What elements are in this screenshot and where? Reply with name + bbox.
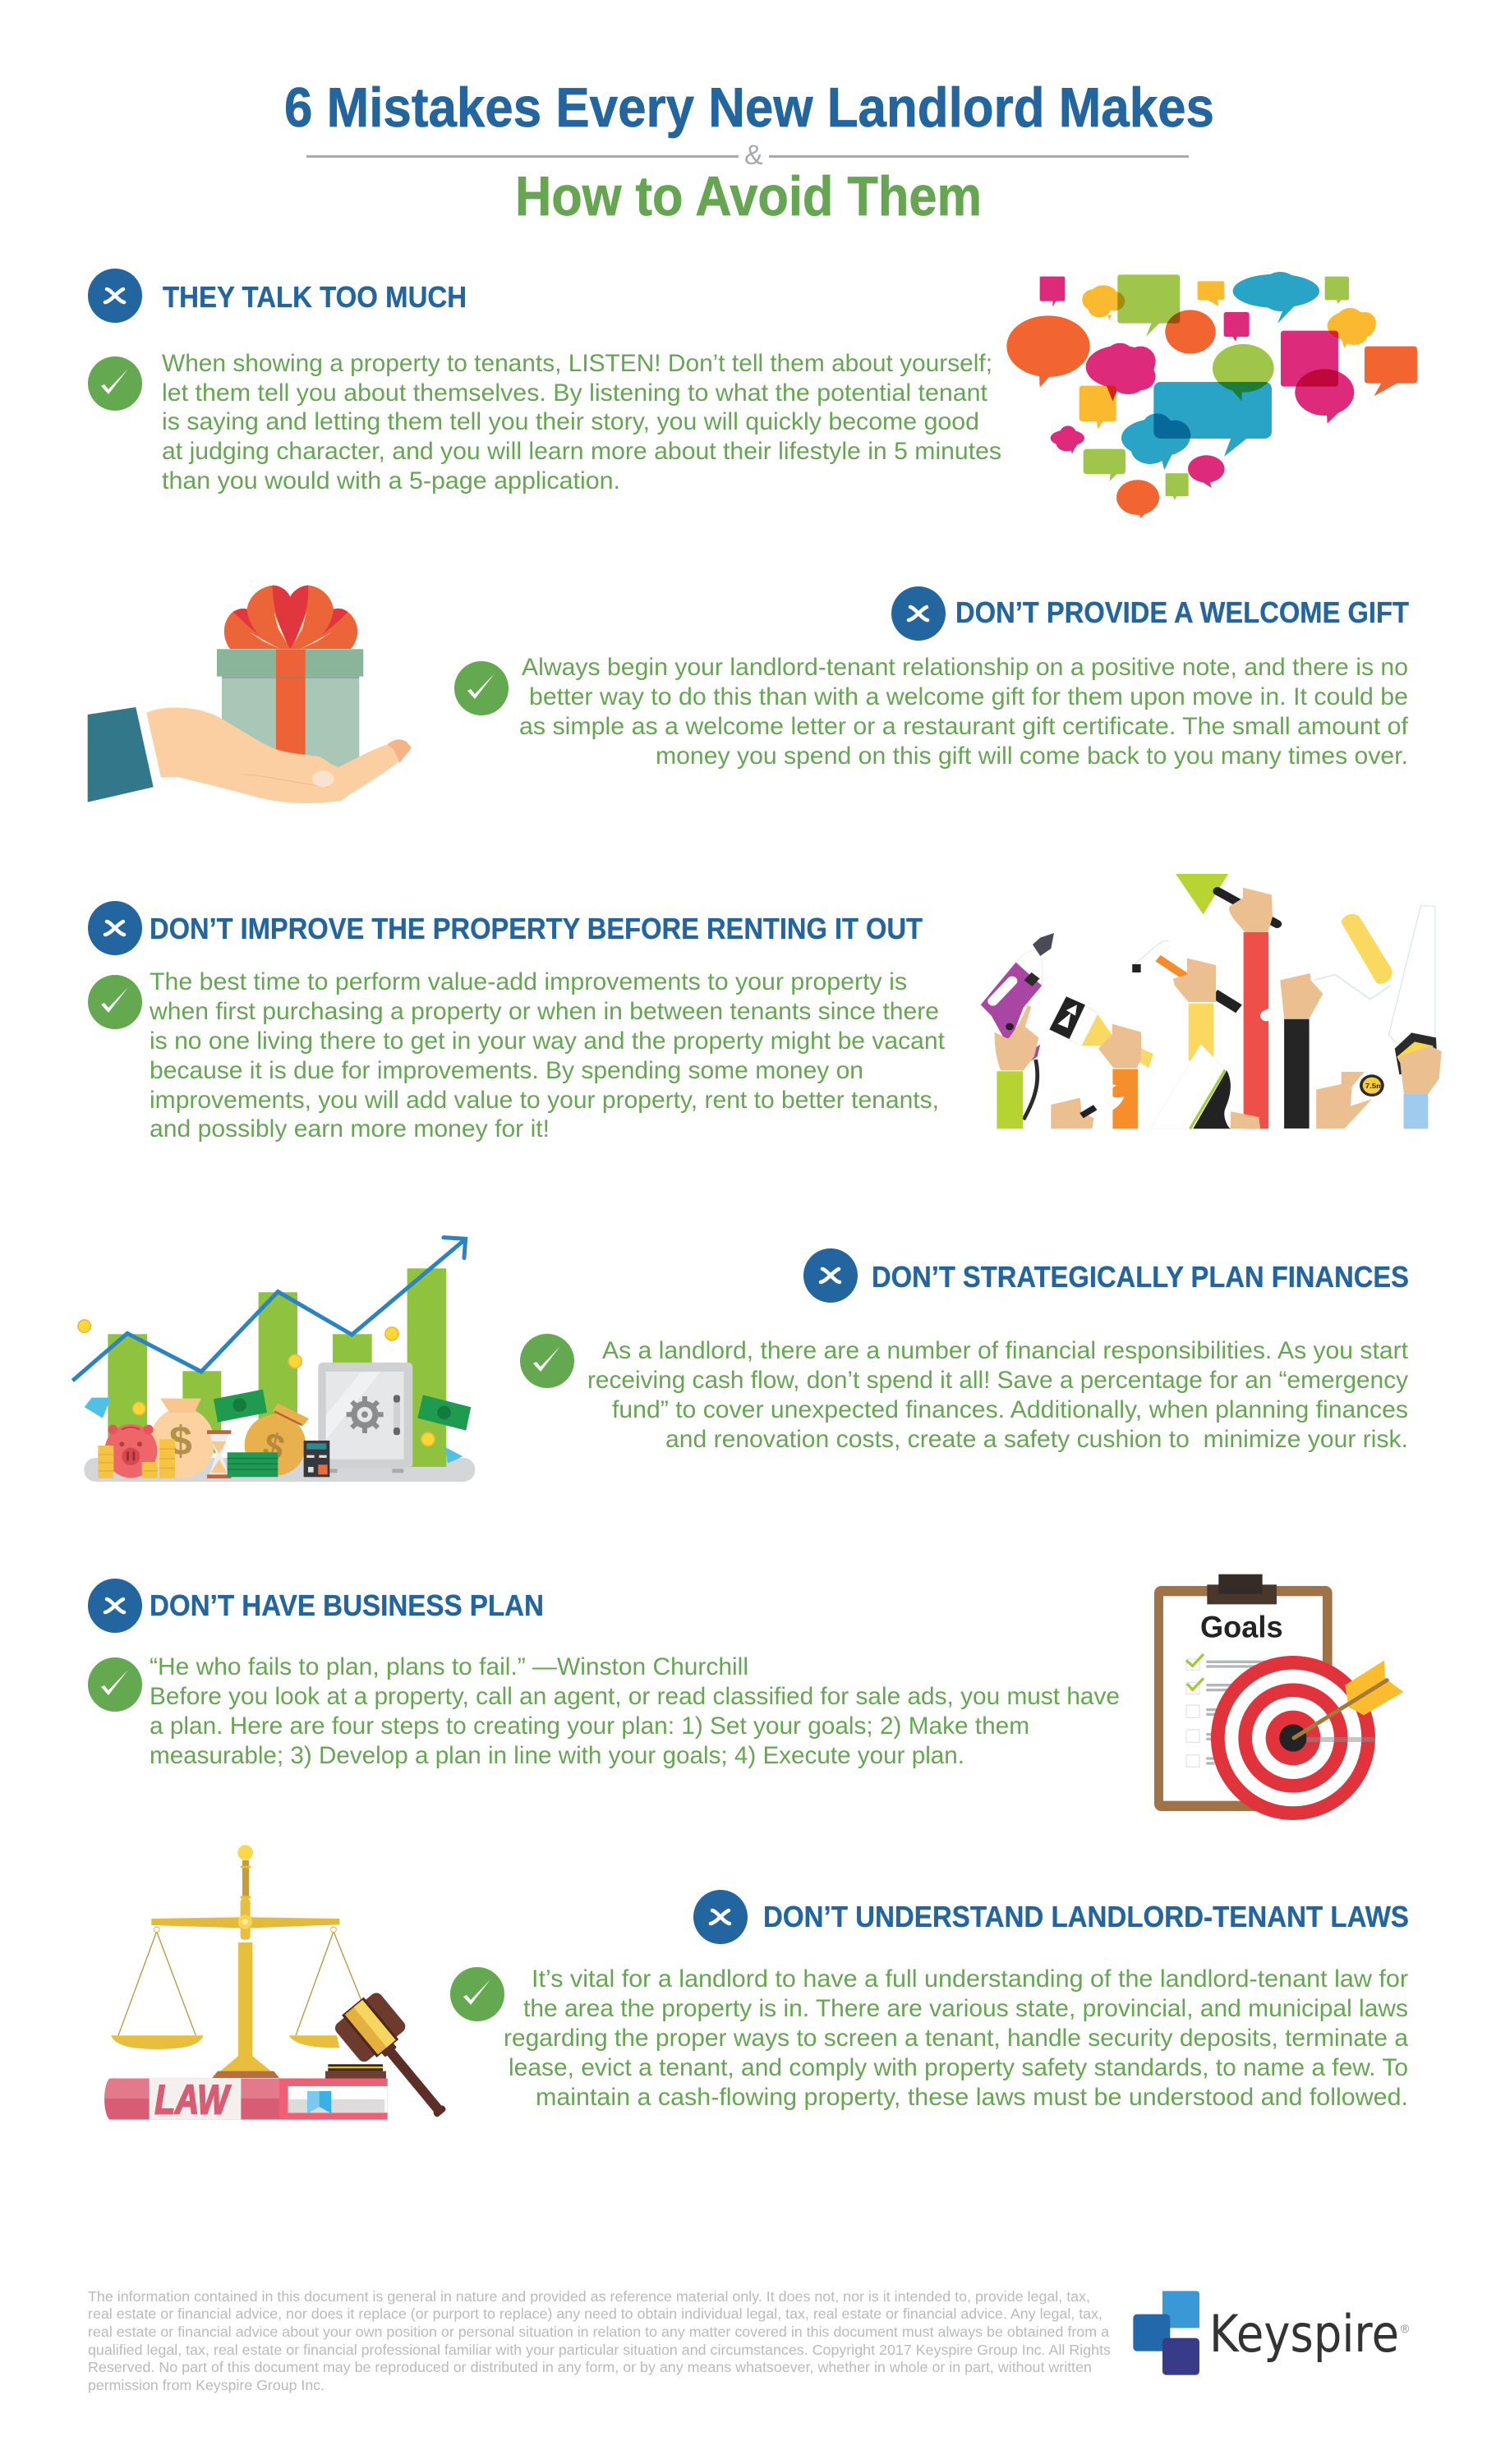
- icon: goals clipboard and target: [1154, 1574, 1403, 1820]
- icon: gift on hand: [88, 586, 412, 803]
- body text: is saying and letting them tell you their story, you will quickly become good: [162, 408, 979, 435]
- title: [284, 76, 1214, 228]
- disclaimer text: The information contained in this document is general in nature and provided as reference material only. It does not, nor is it intended to, provide legal, tax,: [88, 2288, 1090, 2305]
- disclaimer text: real estate or financial advice about your own position or personal situation in relation to any matter covered in this document must always be obtained from a: [88, 2324, 1109, 2340]
- body text: The best time to perform value-add improvements to your property is: [150, 968, 907, 995]
- body text: [504, 1965, 1408, 2111]
- disclaimer text: qualified legal, tax, real estate or financial professional familiar with your particular situation and circumstances. Copyright 2017 Keyspire Group Inc. All Rights: [88, 2342, 1111, 2358]
- logo: Keyspire: Keyspire: [1209, 2304, 1399, 2364]
- icon: x mark: [88, 269, 142, 323]
- logo: Keyspire: ®: [1401, 2322, 1410, 2335]
- body text: as simple as a welcome letter or a restaurant gift certificate. The small amount of: [519, 713, 1409, 740]
- heading: DON’T PROVIDE A WELCOME GIFT: [955, 595, 1409, 629]
- icon: x mark: [88, 1579, 142, 1633]
- heading: DON’T IMPROVE THE PROPERTY BEFORE RENTING IT OUT: [150, 912, 923, 945]
- body text: [162, 350, 1001, 494]
- body text: at judging character, and you will learn more about their lifestyle in 5 minutes: [162, 438, 1001, 465]
- body text: It’s vital for a landlord to have a full understanding of the landlord-tenant law for: [532, 1965, 1408, 1993]
- body text: As a landlord, there are a number of financial responsibilities. As you start: [602, 1337, 1409, 1364]
- body text: Before you look at a property, call an agent, or read classified for sale ads, you must have: [150, 1683, 1120, 1710]
- icon: check mark: [88, 356, 142, 411]
- icon: scales, book and gavel: [104, 1845, 464, 2132]
- disclaimer text: Reserved. No part of this document may be reproduced or distributed in any form, or by any means whatsoever, whether in whole or in part, without written: [88, 2359, 1092, 2375]
- logo: Keyspire: [1133, 2291, 1410, 2375]
- body text: the area the property is in. There are various state, provincial, and municipal laws: [523, 1995, 1408, 2022]
- body text: money you spend on this gift will come back to you many times over.: [656, 742, 1408, 770]
- panel: business plan: [88, 1574, 1403, 1820]
- chart: growth bars with money: $: [169, 1418, 192, 1464]
- icon: speech bubbles: [1006, 272, 1417, 518]
- body text: fund” to cover unexpected finances. Additionally, when planning finances: [612, 1396, 1408, 1423]
- panel: plan finances: [72, 1238, 1409, 1482]
- body text: and renovation costs, create a safety cushion to minimize your risk.: [665, 1426, 1408, 1453]
- chart: growth bars with money: $: [259, 1425, 288, 1469]
- icon: check mark: [454, 661, 509, 715]
- body text: receiving cash flow, don’t spend it all! Save a percentage for an “emergency: [587, 1367, 1408, 1394]
- icon: check mark: [450, 1967, 504, 2021]
- body text: [519, 654, 1409, 770]
- heading: DON’T STRATEGICALLY PLAN FINANCES: [872, 1260, 1409, 1294]
- body text: When showing a property to tenants, LISTEN! Don’t tell them about yourself;: [162, 350, 992, 377]
- icon: hands with tools: [981, 874, 1442, 1129]
- chart: growth bars with money: [72, 1238, 475, 1482]
- panel: they talk too much: [88, 269, 1417, 518]
- disclaimer text: real estate or financial advice, nor does it replace (or purport to replace) any need to obtain individual legal, tax, real estate or financial advice. Any legal, tax,: [88, 2305, 1102, 2322]
- title: 6 Mistakes Every New Landlord Makes: [284, 76, 1214, 139]
- icon: scales, book and gavel: LAW: [154, 2076, 231, 2122]
- body text: improvements, you will add value to your property, rent to better tenants,: [150, 1087, 939, 1114]
- body text: better way to do this than with a welcome gift for them upon move in. It could be: [529, 683, 1408, 710]
- body text: let them tell you about themselves. By listening to what the potential tenant: [162, 379, 988, 407]
- body text: because it is due for improvements. By spending some money on: [150, 1057, 863, 1084]
- body text: “He who fails to plan, plans to fail.” —Winston Churchill: [150, 1653, 748, 1680]
- panel: welcome gift: [88, 586, 1409, 803]
- icon: check mark: [88, 1657, 142, 1712]
- body text: a plan. Here are four steps to creating your plan: 1) Set your goals; 2) Make them: [150, 1712, 1029, 1740]
- icon: goals clipboard and target: Goals: [1200, 1609, 1283, 1643]
- disclaimer text: permission from Keyspire Group Inc.: [88, 2377, 325, 2393]
- icon: x mark: [88, 901, 142, 955]
- heading: DON’T HAVE BUSINESS PLAN: [150, 1588, 544, 1622]
- body text: maintain a cash-flowing property, these laws must be understood and followed.: [536, 2084, 1408, 2111]
- panel: landlord-tenant laws: [104, 1845, 1409, 2132]
- icon: hands with tools: 7.5m: [1365, 1082, 1383, 1090]
- icon: x mark: [891, 586, 946, 641]
- body text: lease, evict a tenant, and comply with property safety standards, to name a few. To: [509, 2054, 1408, 2081]
- body text: [587, 1337, 1409, 1453]
- body text: measurable; 3) Develop a plan in line with your goals; 4) Execute your plan.: [150, 1742, 964, 1769]
- panel: improve property: [88, 874, 1442, 1142]
- title: How to Avoid Them: [515, 165, 982, 228]
- body text: Always begin your landlord-tenant relationship on a positive note, and there is no: [522, 654, 1408, 681]
- heading: DON’T UNDERSTAND LANDLORD-TENANT LAWS: [763, 1900, 1409, 1933]
- body text: regarding the proper ways to screen a tenant, handle security deposits, terminate a: [504, 2025, 1408, 2052]
- icon: check mark: [88, 975, 142, 1029]
- title: &: [744, 140, 763, 171]
- body text: than you would with a 5-page application.: [162, 467, 620, 494]
- body text: [150, 1653, 1120, 1769]
- icon: check mark: [520, 1334, 574, 1388]
- icon: x mark: [693, 1890, 748, 1944]
- heading: THEY TALK TOO MUCH: [163, 280, 467, 314]
- body text: and possibly earn more money for it!: [150, 1115, 550, 1142]
- body text: is no one living there to get in your way and the property might be vacant: [150, 1027, 946, 1055]
- disclaimer text: [88, 2288, 1111, 2393]
- icon: x mark: [803, 1248, 858, 1303]
- body text: when first purchasing a property or when in between tenants since there: [149, 998, 939, 1025]
- body text: [149, 968, 946, 1142]
